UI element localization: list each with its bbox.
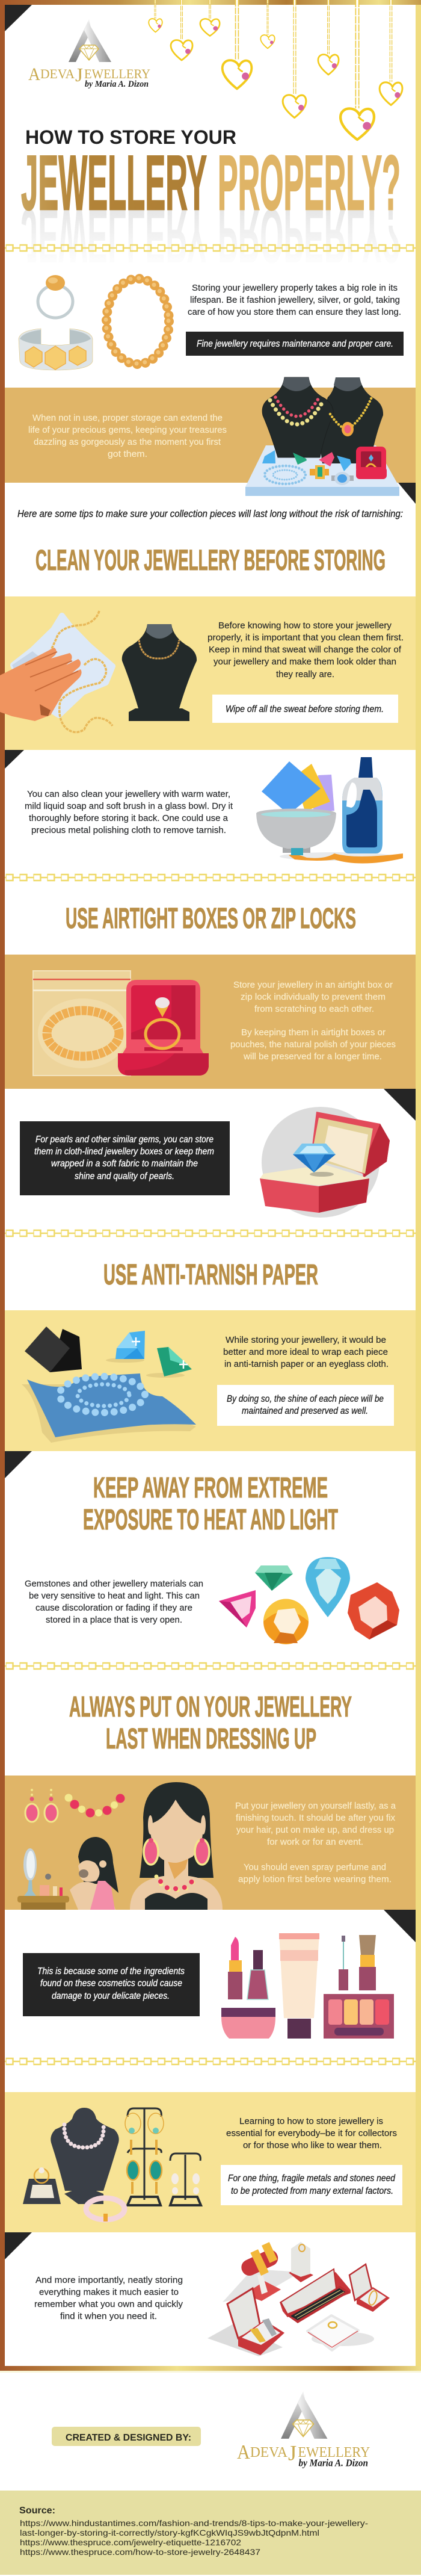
heat text: cause discoloration or fading if they are bbox=[35, 1603, 192, 1613]
icon: bust with chain bbox=[122, 624, 197, 721]
panel: anti-tarnish bbox=[5, 1310, 416, 1451]
logo: Adeva Jewellery: J bbox=[75, 64, 83, 85]
panel text: storage: When not in use, proper storage can extend the bbox=[32, 413, 223, 423]
clean text bbox=[207, 621, 404, 680]
callout: pearls: shine and quality of pearls. bbox=[75, 1171, 174, 1181]
dressing up text: for work or for an event. bbox=[267, 1838, 363, 1847]
icon: pearl bracelet bbox=[86, 2198, 124, 2221]
footer: sources: last-longer-by-storing-it-correctly/story-kgfKCgkWIqJS9wbJtQdpnM.html bbox=[20, 2528, 319, 2537]
icon: woman with earrings bbox=[130, 1782, 223, 1910]
corner triangle: right bbox=[384, 1089, 416, 1121]
icon: gems on paper bbox=[106, 1331, 192, 1378]
panel text: storage bbox=[28, 413, 227, 459]
warm water text: mild liquid soap and soft brush in a glass bowl. Dry it bbox=[25, 802, 233, 811]
callout: pearls bbox=[20, 1121, 230, 1195]
callout: fragile metals: to be protected from many external factors. bbox=[231, 2186, 393, 2196]
anti-tarnish text bbox=[223, 1336, 389, 1369]
icon: cloth with blue necklace bbox=[22, 1373, 196, 1443]
chain divider bbox=[5, 2057, 416, 2066]
heat text: be very sensitive to heat and light. This can bbox=[29, 1591, 200, 1601]
dressing up text: finishing touch. It should be after you fix bbox=[236, 1813, 396, 1823]
logo: Adeva Jewellery footer: by Maria A. Dizon bbox=[298, 2457, 368, 2468]
callout: shine: maintained and preserved as well. bbox=[242, 1406, 368, 1416]
airtight text: will be preserved for a longer time. bbox=[243, 1052, 382, 1062]
warm water text bbox=[25, 790, 233, 835]
panel: conclusion bbox=[5, 2092, 416, 2232]
footer: sources: https://www.thespruce.com/how-to-store-jewelry-2648437 bbox=[20, 2547, 260, 2557]
logo: Adeva Jewellery footer: EWELLERY bbox=[298, 2444, 370, 2460]
icon: jewellery display table bbox=[245, 377, 399, 496]
callout: cosmetics: damage to your delicate pieces. bbox=[52, 1991, 170, 2001]
callout: fragile metals bbox=[221, 2165, 402, 2205]
heat text: stored in a place that is very open. bbox=[46, 1615, 182, 1625]
dressing up text bbox=[235, 1801, 396, 1884]
icon: pearl necklace bust bbox=[51, 2108, 119, 2204]
closing text: find it when you need it. bbox=[60, 2312, 157, 2321]
chain divider bbox=[5, 1229, 416, 1237]
warm water text: You can also clean your jewellery with warm water, bbox=[27, 790, 230, 799]
panel text: storage: dazzling as gorgeously as the moment you first bbox=[34, 438, 221, 447]
icon: cosmetics bbox=[221, 1933, 394, 2039]
intro text bbox=[188, 283, 401, 317]
icon: colourful gemstones bbox=[219, 1557, 399, 1644]
footer: sources bbox=[0, 2491, 421, 2575]
callout: wipe: Wipe off all the sweat before storing them. bbox=[226, 704, 384, 714]
dressing up text: You should even spray perfume and bbox=[244, 1863, 386, 1872]
dressing up text: apply lotion first before wearing them. bbox=[238, 1875, 392, 1884]
logo: Adeva Jewellery footer bbox=[237, 2391, 370, 2468]
credit badge bbox=[52, 2427, 201, 2446]
warm water text: precious metal polishing cloth to remove tarnish. bbox=[31, 826, 226, 835]
chain divider bbox=[5, 873, 416, 882]
anti-tarnish text: better and more ideal to wrap each piece bbox=[223, 1348, 388, 1357]
icon: woman applying makeup at table bbox=[17, 1837, 118, 1910]
callout: cosmetics: This is because some of the ingredients bbox=[37, 1966, 185, 1977]
intro text: lifespan. Be it fashion jewellery, silver, or gold, taking bbox=[190, 296, 400, 305]
footer: sources: Source: bbox=[19, 2506, 55, 2516]
clean text: your jewellery and make them look older than bbox=[214, 657, 396, 667]
callout: shine: By doing so, the shine of each piece will be bbox=[227, 1394, 384, 1404]
icon: red ring box bbox=[118, 980, 209, 1076]
logo: Adeva Jewellery: A bbox=[28, 64, 40, 84]
credit badge: CREATED & DESIGNED BY: bbox=[66, 2433, 191, 2443]
airtight text: pouches, the natural polish of your pieces bbox=[230, 1040, 396, 1050]
closing text: And more importantly, neatly storing bbox=[35, 2276, 183, 2285]
airtight text: zip lock individually to prevent them bbox=[241, 992, 386, 1002]
closing text: remember what you own and quickly bbox=[34, 2300, 183, 2309]
logo: Adeva Jewellery: by Maria A. Dizon bbox=[85, 79, 149, 89]
logo: Adeva Jewellery: DEVA bbox=[40, 66, 75, 81]
icon: zip bag with bracelet bbox=[33, 971, 131, 1076]
callout: fine jewellery bbox=[186, 332, 404, 356]
callout: cosmetics: found on these cosmetics could cause bbox=[40, 1978, 182, 1989]
callout: fine jewellery: Fine jewellery requires maintenance and proper care. bbox=[197, 339, 393, 349]
icon: isometric jewellery boxes bbox=[207, 2242, 390, 2356]
decoration: hanging heart pendants bbox=[149, 0, 402, 140]
clean text: properly, it is important that you clean them first. bbox=[207, 633, 404, 643]
icon: ring and cuff bbox=[19, 275, 93, 370]
airtight text: from scratching to each other. bbox=[254, 1005, 374, 1014]
footer: sources: https://www.hindustantimes.com/fashion-and-trends/8-tips-to-make-your-jewellery- bbox=[20, 2518, 368, 2528]
icon: ring stand bbox=[23, 2167, 61, 2204]
icon: earring stands bbox=[125, 2108, 201, 2205]
intro text: care of how you store them can ensure they last long. bbox=[188, 308, 401, 317]
icon: pearl bracelet bbox=[106, 278, 169, 364]
conclusion text: or for those who like to wear them. bbox=[243, 2141, 382, 2150]
panel: clean bbox=[5, 596, 416, 750]
callout: wipe bbox=[212, 695, 398, 723]
heading: heat and light bbox=[83, 1472, 338, 1536]
corner triangle: right bbox=[384, 1910, 416, 1942]
title: HOW TO STORE YOUR bbox=[25, 126, 236, 148]
clean text: Before knowing how to store your jewellery bbox=[218, 621, 392, 631]
icon: earrings and necklace bbox=[25, 1789, 125, 1822]
warm water text: thoroughly before storing it back. One could use a bbox=[29, 814, 229, 823]
icon: black tarnish paper bbox=[25, 1327, 82, 1372]
callout: pearls: For pearls and other similar gems, you can store bbox=[35, 1135, 214, 1145]
callout: pearls: wrapped in a soft fabric to maintain the bbox=[51, 1159, 198, 1169]
corner triangle: left bbox=[5, 1451, 32, 1478]
closing text bbox=[34, 2276, 183, 2321]
logo: Adeva Jewellery footer: A bbox=[237, 2442, 250, 2463]
heat text bbox=[25, 1579, 203, 1625]
airtight text: By keeping them in airtight boxes or bbox=[241, 1028, 386, 1038]
callout: pearls: them in cloth-lined jewellery boxes or keep them bbox=[34, 1147, 214, 1157]
panel: gold storage bbox=[5, 388, 416, 483]
logo: Adeva Jewellery: EWELLERY bbox=[84, 66, 150, 81]
airtight text bbox=[230, 980, 396, 1062]
conclusion text: Learning to how to store jewellery is bbox=[239, 2117, 383, 2126]
conclusion text bbox=[226, 2117, 397, 2150]
panel: airtight bbox=[5, 955, 416, 1089]
dressing up text: your hair, put on make up, and dress up bbox=[236, 1825, 394, 1835]
corner triangle: left bbox=[5, 2232, 32, 2259]
callout: shine bbox=[217, 1385, 394, 1426]
footer: sources: https://www.thespruce.com/jewelry-etiquette-1216702 bbox=[20, 2537, 241, 2547]
heading: dressing up bbox=[69, 1691, 352, 1755]
icon: gem in red box bbox=[260, 1107, 390, 1218]
clean text: they really are. bbox=[276, 670, 334, 680]
corner triangle: left bbox=[5, 750, 24, 769]
panel: dressing up bbox=[5, 1776, 416, 1910]
logo: Adeva Jewellery footer: J bbox=[288, 2441, 297, 2465]
corner triangle: right bbox=[398, 483, 416, 504]
logo: Adeva Jewellery bbox=[28, 19, 150, 89]
corner triangle: top left bbox=[5, 5, 32, 31]
chain divider bbox=[5, 244, 416, 252]
callout: fragile metals: For one thing, fragile metals and stones need bbox=[228, 2173, 396, 2184]
logo: Adeva Jewellery footer: DEVA bbox=[250, 2444, 287, 2460]
airtight text: Store your jewellery in an airtight box or bbox=[233, 980, 393, 990]
closing text: everything makes it much easier to bbox=[39, 2288, 179, 2297]
clean text: Keep in mind that sweat will change the color of bbox=[209, 645, 402, 655]
conclusion text: essential for everybody–be it for collectors bbox=[226, 2129, 397, 2138]
chain divider bbox=[5, 1662, 416, 1670]
callout: cosmetics bbox=[23, 1953, 200, 2016]
intro text: Storing your jewellery properly takes a big role in its bbox=[192, 283, 398, 293]
heat text: Gemstones and other jewellery materials can bbox=[25, 1579, 203, 1589]
icon: hand wiping chain with cloth bbox=[0, 611, 112, 732]
anti-tarnish text: in anti-tarnish paper or an eyeglass cloth. bbox=[224, 1360, 389, 1369]
panel text: storage: life of your precious gems, keeping your treasures bbox=[28, 426, 227, 435]
icon: cleaning bowl, cloths, soap and brush bbox=[256, 757, 403, 864]
dressing up text: Put your jewellery on yourself lastly, as a bbox=[235, 1801, 396, 1811]
anti-tarnish text: While storing your jewellery, it would be bbox=[226, 1336, 386, 1345]
panel text: storage: got them. bbox=[108, 450, 147, 459]
